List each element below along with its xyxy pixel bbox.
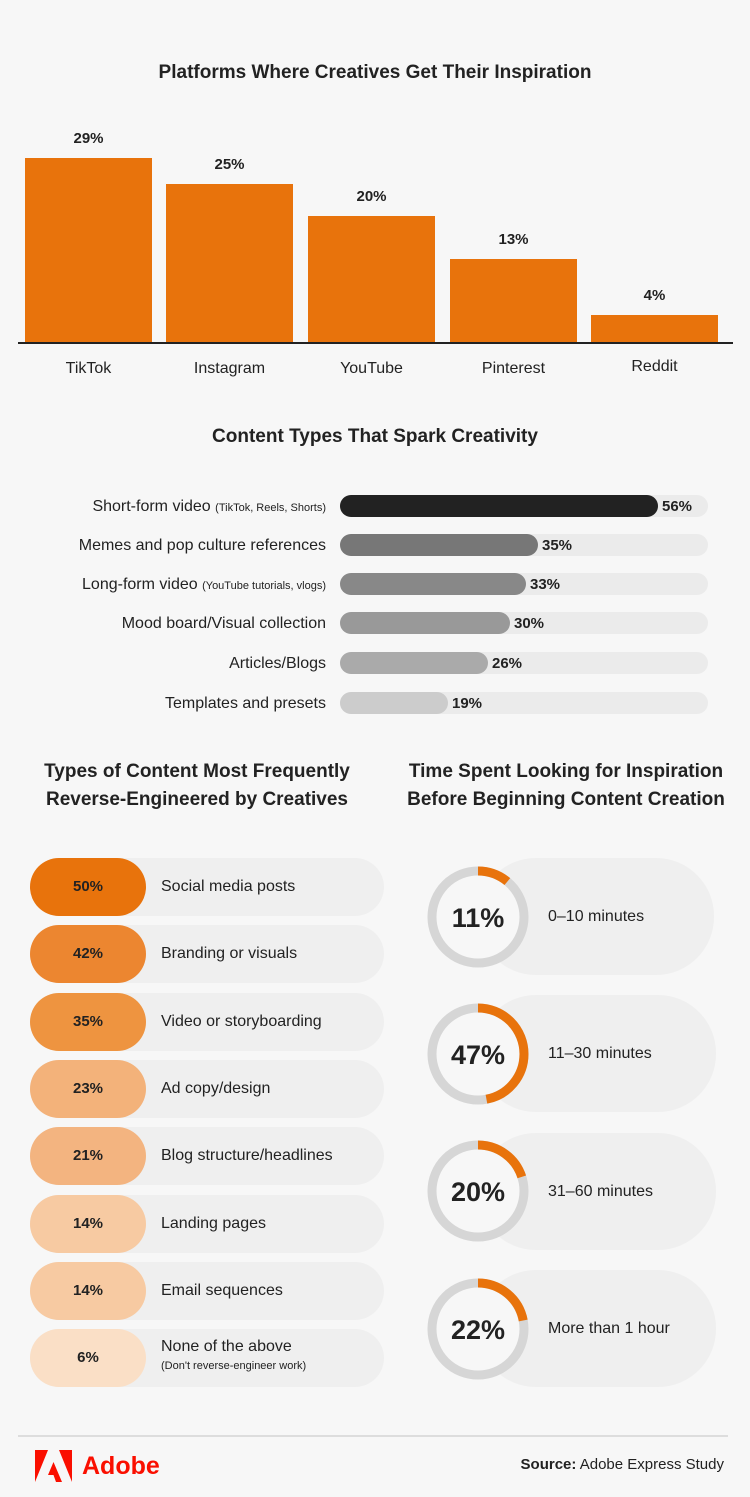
bar chart: platforms [18,130,733,344]
horizontal bar chart: content types: Short-form video (TikTok, Reels, Shorts) [92,498,326,515]
list: reverse-engineered content: Branding or visuals [161,945,297,962]
title: time spent: Time Spent Looking for Inspiration Before Beginning Content Creation [407,761,725,810]
list: reverse-engineered content: 42% [73,945,103,962]
donut list: time spent: 47% [451,1040,505,1070]
list: reverse-engineered content: Blog structure/headlines [161,1147,333,1164]
donut list: time spent: 22% [451,1315,505,1345]
value labels: 25% [214,156,245,173]
list: reverse-engineered content: 21% [73,1147,103,1164]
value labels: 20% [356,188,387,205]
logo: Adobe: Adobe [82,1452,160,1480]
donut list: time spent: 20% [451,1177,505,1207]
list: reverse-engineered content: 50% [73,878,103,895]
horizontal bar chart: content types: 35% [542,537,572,554]
bar: Instagram [166,184,293,342]
title: content types: Content Types That Spark Creativity [212,426,538,447]
list: reverse-engineered content: Social media posts [161,878,295,895]
list: reverse-engineered content: Landing pages [161,1215,266,1232]
category labels [66,358,678,377]
horizontal bar chart: content types: 19% [452,695,482,712]
bar: YouTube [308,216,435,342]
category labels: Pinterest [482,360,545,377]
category labels: YouTube [340,360,403,377]
list: reverse-engineered content: None of the above [161,1338,292,1355]
horizontal bar chart: content types: 56% [662,498,692,515]
title: reverse-engineered: Types of Content Most Frequently Reverse-Engineered by Creatives [44,761,350,810]
list: reverse-engineered content: Email sequences [161,1282,283,1299]
bar: Reddit [591,315,718,342]
category labels: TikTok [66,360,111,377]
value labels: 4% [644,287,665,304]
donut list: time spent: 11–30 minutes [548,1045,652,1062]
list: reverse-engineered content: 23% [73,1080,103,1097]
value labels [73,130,665,304]
bar: TikTok [25,158,152,342]
title: platforms: Platforms Where Creatives Get Their Inspiration [159,62,591,83]
donut list: time spent: More than 1 hour [548,1320,670,1337]
donut list: time spent: 11% [452,903,504,933]
horizontal bar chart: content types: Memes and pop culture references [79,537,326,554]
horizontal bar chart: content types: Mood board/Visual collection [122,615,326,632]
list: reverse-engineered content: Ad copy/design [161,1080,270,1097]
horizontal bar chart: content types [79,495,708,714]
list: reverse-engineered content: 14% [73,1215,103,1232]
donut list: time spent [428,866,670,1380]
source: Source: Adobe Express Study [521,1456,724,1473]
logo: Adobe [35,1450,160,1482]
donut list: time spent: 31–60 minutes [548,1183,653,1200]
horizontal bar chart: content types: 30% [514,615,544,632]
value labels: 29% [73,130,104,147]
horizontal bar chart: content types: 26% [492,655,522,672]
list: reverse-engineered content: (Don't reverse-engineer work) [161,1360,306,1372]
horizontal bar chart: content types: 33% [530,576,560,593]
list: reverse-engineered content: 14% [73,1282,103,1299]
list: reverse-engineered content: 35% [73,1013,103,1030]
donut list: time spent: 0–10 minutes [548,908,644,925]
bar: Pinterest [450,259,577,342]
category labels: Reddit [631,358,678,375]
horizontal bar chart: content types: Templates and presets [165,695,326,712]
horizontal bar chart: content types: Long-form video (YouTube tutorials, vlogs) [82,576,326,593]
list: reverse-engineered content: 6% [77,1349,99,1366]
horizontal bar chart: content types: Articles/Blogs [229,655,326,672]
value labels: 13% [498,231,529,248]
list: reverse-engineered content [30,858,333,1387]
category labels: Instagram [194,360,265,377]
list: reverse-engineered content: Video or storyboarding [161,1013,322,1030]
